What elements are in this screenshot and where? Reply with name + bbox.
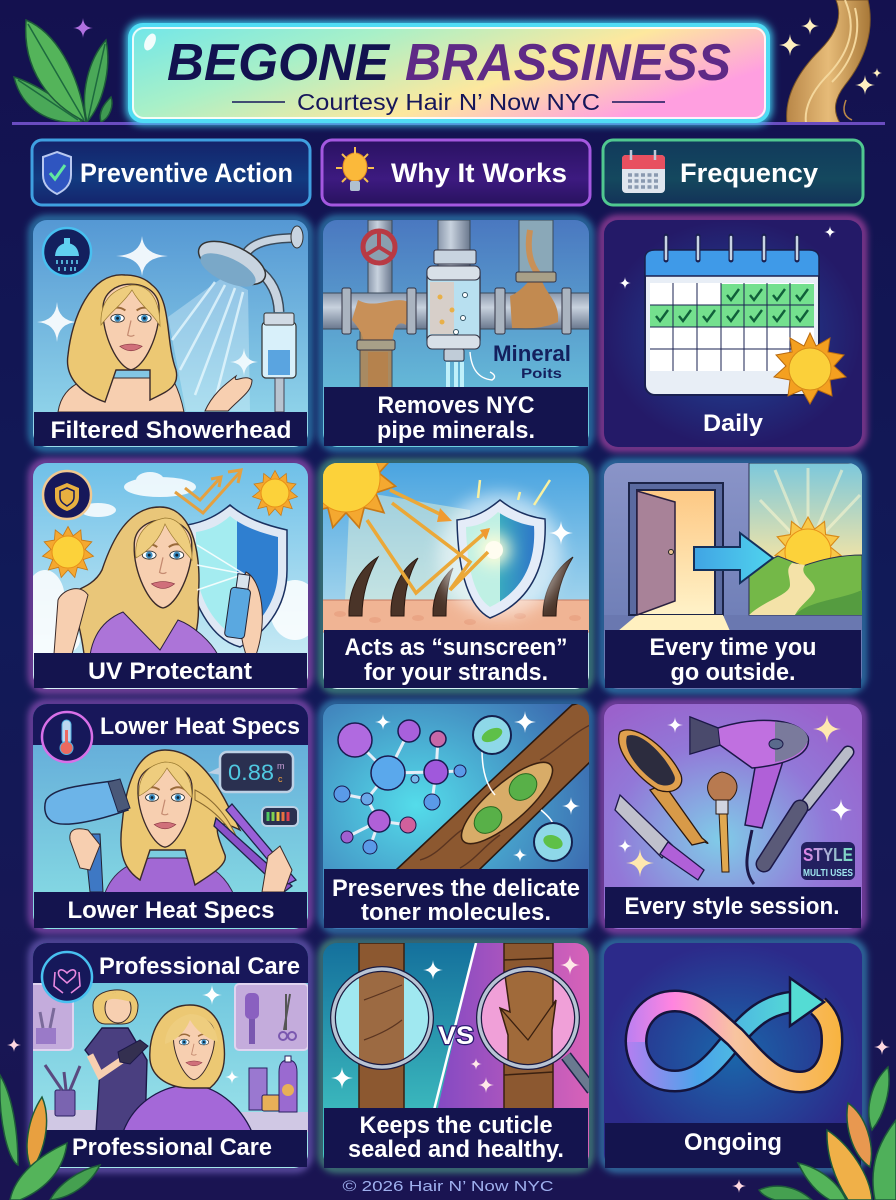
panel: Ongoing (603, 942, 863, 1169)
outdoor scene (749, 463, 863, 615)
woman with blonde hair (58, 275, 252, 412)
sparkles: lower margin (7, 1038, 890, 1193)
caption bar (324, 387, 588, 446)
magnifier: raised cuticle (478, 968, 592, 1090)
panel: Acts as sunscreen: Acts as “sunscreen” (344, 634, 568, 661)
icon: calendar (622, 150, 665, 193)
panel: Every style session: Every style session. (624, 893, 840, 920)
panel: Ongoing: Ongoing (684, 1129, 782, 1156)
temperature display: 0.88 (228, 760, 274, 785)
caption bar (34, 1130, 307, 1167)
caption bar (34, 653, 307, 688)
magnifier: smooth cuticle (330, 965, 435, 1070)
panel: Preserves toner molecules: toner molecules. (361, 899, 551, 926)
caption bar (605, 1123, 861, 1168)
shelf panels (30, 984, 308, 1050)
panel: Daily (603, 219, 863, 448)
doorway (618, 483, 730, 631)
seated client (123, 1005, 252, 1132)
panel: Every time you go outside: Every time you (650, 634, 816, 661)
panel: UV Protectant (0, 462, 320, 690)
paddle brush (619, 730, 708, 845)
title banner: BRASSINESS (405, 34, 731, 92)
panel: Every style session (603, 703, 863, 930)
scalp (322, 600, 592, 632)
hair swirl: top right (779, 0, 882, 123)
arrows (175, 470, 241, 513)
temperature display: m (277, 761, 284, 771)
icon: caring hands (42, 952, 92, 1002)
arrow (694, 533, 773, 583)
panel: Keeps the cuticle sealed: Keeps the cuticle (360, 1112, 552, 1139)
icon badge: shield (43, 471, 91, 519)
caption bar (324, 1108, 588, 1168)
caption bar (34, 892, 307, 928)
icon: light bulb (336, 147, 374, 191)
caption bar (605, 630, 861, 688)
column header: Frequency: Frequency (680, 158, 818, 188)
panel: Keeps the cuticle sealed (322, 942, 592, 1169)
temperature display: c (278, 774, 283, 784)
sun beams (345, 490, 470, 600)
panel: Preserves toner molecules: Preserves the delicate (332, 875, 580, 902)
calendar (645, 236, 819, 395)
column header: Why It Works: Why It Works (391, 158, 567, 188)
leaves: bottom left (0, 1075, 100, 1200)
column header: Preventive Action: Preventive Action (80, 158, 293, 188)
panel: Preserves toner molecules (322, 700, 592, 930)
red valve (363, 231, 395, 263)
top label: Professional Care (99, 953, 300, 980)
infinity arrow (636, 978, 832, 1082)
caption bar (324, 869, 588, 928)
styling comb (615, 795, 704, 880)
column header: Frequency (603, 140, 863, 205)
caption bar (605, 887, 861, 928)
flat iron (214, 804, 296, 892)
VS badge: VS (438, 1022, 474, 1050)
title text: BEGONE (167, 34, 390, 92)
heat level indicator (262, 807, 298, 826)
panel: Lower Heat Specs: Lower Heat Specs (68, 897, 274, 924)
pipes (322, 220, 592, 390)
title banner (126, 21, 772, 125)
column header: Preventive Action (32, 140, 310, 205)
hair strands (359, 943, 553, 1113)
caption bar (34, 412, 307, 446)
bubbles (473, 716, 572, 861)
badge: style multi uses: MULTI USES (803, 868, 853, 879)
panel: Every time you go outside (603, 462, 863, 690)
leaves: top left (14, 20, 112, 122)
panel: Removes NYC pipe minerals: pipe minerals. (377, 417, 535, 444)
label: mineral points: Poits (521, 365, 562, 381)
label: mineral points (494, 345, 570, 378)
divider line (12, 122, 885, 125)
shield (187, 505, 287, 647)
leaves: bottom right (759, 1067, 896, 1200)
top band (33, 704, 308, 745)
icon: thermometer (42, 712, 92, 762)
subtitle: Courtesy Hair N’ Now NYC (297, 89, 600, 115)
toner capsule (460, 762, 554, 844)
molecules (334, 720, 466, 854)
caption bar (324, 630, 588, 688)
clouds (33, 472, 308, 660)
panel: Filtered Showerhead (32, 219, 309, 448)
shield (438, 493, 562, 618)
stylist (85, 990, 148, 1132)
icon: shower badge (43, 228, 91, 276)
woman with spray (54, 507, 262, 655)
panel: Removes NYC pipe minerals: Removes NYC (378, 392, 534, 419)
water spray (168, 278, 250, 411)
icon: suns (42, 470, 298, 578)
label: mineral points: Mineral (493, 341, 571, 366)
panel: Professional Care (30, 942, 310, 1169)
panel: Lower Heat Specs (32, 703, 309, 930)
panel: Keeps the cuticle sealed: sealed and healthy. (348, 1136, 564, 1163)
badge: style multi uses: STYLE (803, 845, 853, 865)
top band (33, 943, 308, 983)
panel: Acts as sunscreen (314, 454, 598, 698)
counters (33, 1056, 310, 1132)
filter cartridge (427, 250, 495, 390)
hair dryer (45, 779, 130, 892)
panel: Professional Care: Professional Care (72, 1134, 272, 1161)
panel: UV Protectant: UV Protectant (88, 658, 252, 685)
temperature display (208, 752, 293, 792)
woman with hair tools (105, 750, 240, 893)
icon: sun (774, 333, 846, 404)
panel: Acts as sunscreen: for your strands. (364, 659, 548, 686)
makeup brush (708, 772, 737, 872)
icon: sun (323, 463, 398, 530)
sparkle: top left purple (73, 18, 93, 38)
footer: © 2026 Hair N’ Now NYC (342, 1178, 554, 1195)
panel: Every time you go outside: go outside. (670, 659, 796, 686)
curling iron (764, 752, 848, 864)
hair strand (395, 700, 592, 871)
badge: style multi uses (801, 842, 855, 880)
caption: Daily (703, 410, 764, 437)
top label: Lower Heat Specs (100, 713, 300, 740)
column header: Why It Works (322, 140, 590, 205)
purple hair dryer (690, 717, 808, 884)
icon: shield (43, 152, 71, 194)
reflected arrows (367, 490, 488, 593)
hair follicles (349, 557, 573, 616)
shower arm and filter (192, 226, 303, 412)
panel: Removes NYC pipe minerals (322, 219, 592, 448)
panel: Filtered Showerhead: Filtered Showerhead (50, 417, 292, 444)
